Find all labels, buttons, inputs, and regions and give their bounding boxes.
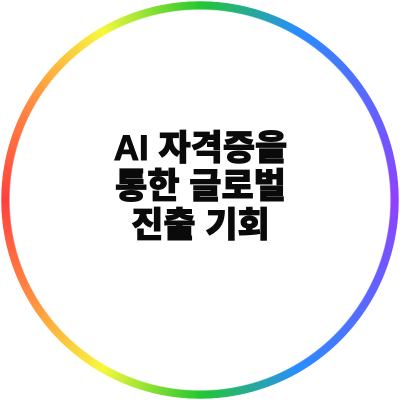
title: AI 자격증을	[114, 128, 287, 168]
title: 통한 글로벌	[115, 167, 286, 206]
title	[114, 128, 287, 244]
title: 진출 기회	[131, 206, 270, 244]
